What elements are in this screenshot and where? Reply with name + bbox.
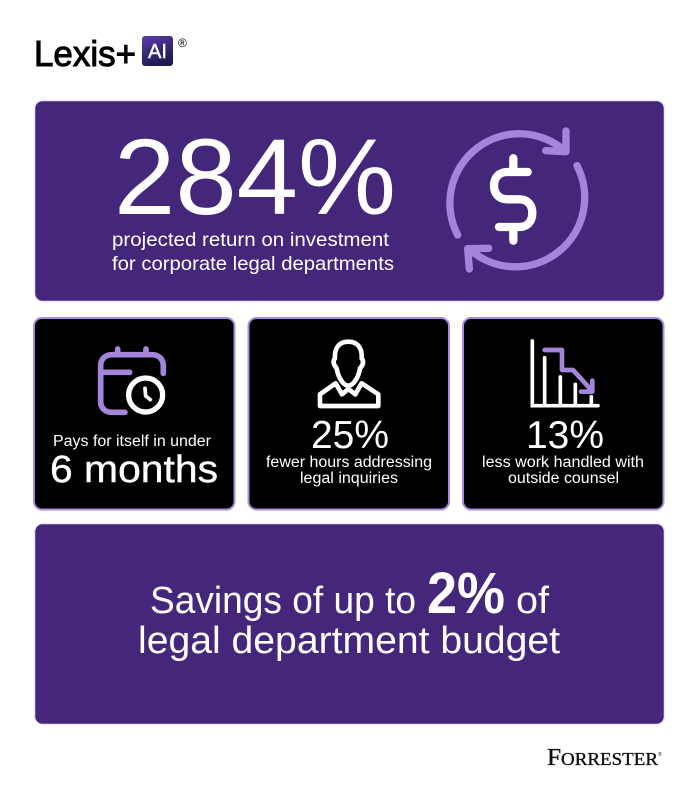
text: savings of up to 2% of legal department budget: legal department budget — [138, 620, 560, 662]
text: pays for itself in under: Pays for itself in under — [53, 433, 211, 450]
stat: 6 months: 6 months — [50, 449, 218, 491]
text: less work handled with outside counsel: less work handled with — [482, 454, 644, 471]
icon: dollar with circular arrows — [450, 131, 585, 269]
text: projected return on investment: for corporate legal departments — [112, 253, 394, 275]
logo: Lexis+ AI: ® — [178, 36, 187, 50]
text: fewer hours addressing legal inquiries — [266, 454, 432, 487]
text: projected return on investment: projected return on investment — [112, 229, 390, 251]
logo: Lexis+ AI: AI — [148, 41, 167, 63]
stat: 25%: 25% — [311, 414, 389, 457]
text: fewer hours addressing legal inquiries: fewer hours addressing — [266, 454, 432, 471]
panel: 284% return on investment — [34, 100, 664, 302]
card: pays for itself — [34, 318, 234, 510]
logo: Forrester: ® — [658, 751, 662, 758]
text: projected return on investment — [112, 229, 394, 275]
stat: 284%: 284% — [114, 116, 396, 237]
card: less outside counsel work — [463, 318, 664, 510]
logo: Lexis+ AI — [34, 33, 187, 74]
icon: calendar with clock — [101, 349, 163, 412]
icon: person — [320, 342, 378, 406]
panel: savings — [34, 524, 664, 724]
icon: declining bar chart — [532, 341, 598, 406]
stat: 13%: 13% — [526, 414, 604, 457]
text: savings of up to 2% of legal department budget: 2% — [427, 561, 505, 626]
text: fewer hours addressing legal inquiries: legal inquiries — [300, 470, 398, 487]
logo: Forrester: FORRESTER — [547, 745, 658, 771]
text: savings of up to 2% of legal department budget: Savings of up to — [150, 580, 416, 622]
text: savings of up to 2% of legal department budget: of — [516, 580, 549, 622]
text: less work handled with outside counsel: outside counsel — [508, 470, 619, 487]
text: less work handled with outside counsel — [482, 454, 644, 487]
card: fewer hours — [248, 318, 449, 510]
logo: Lexis+ AI: Lexis+ — [34, 33, 136, 74]
text: savings of up to 2% of legal department budget — [138, 561, 560, 662]
